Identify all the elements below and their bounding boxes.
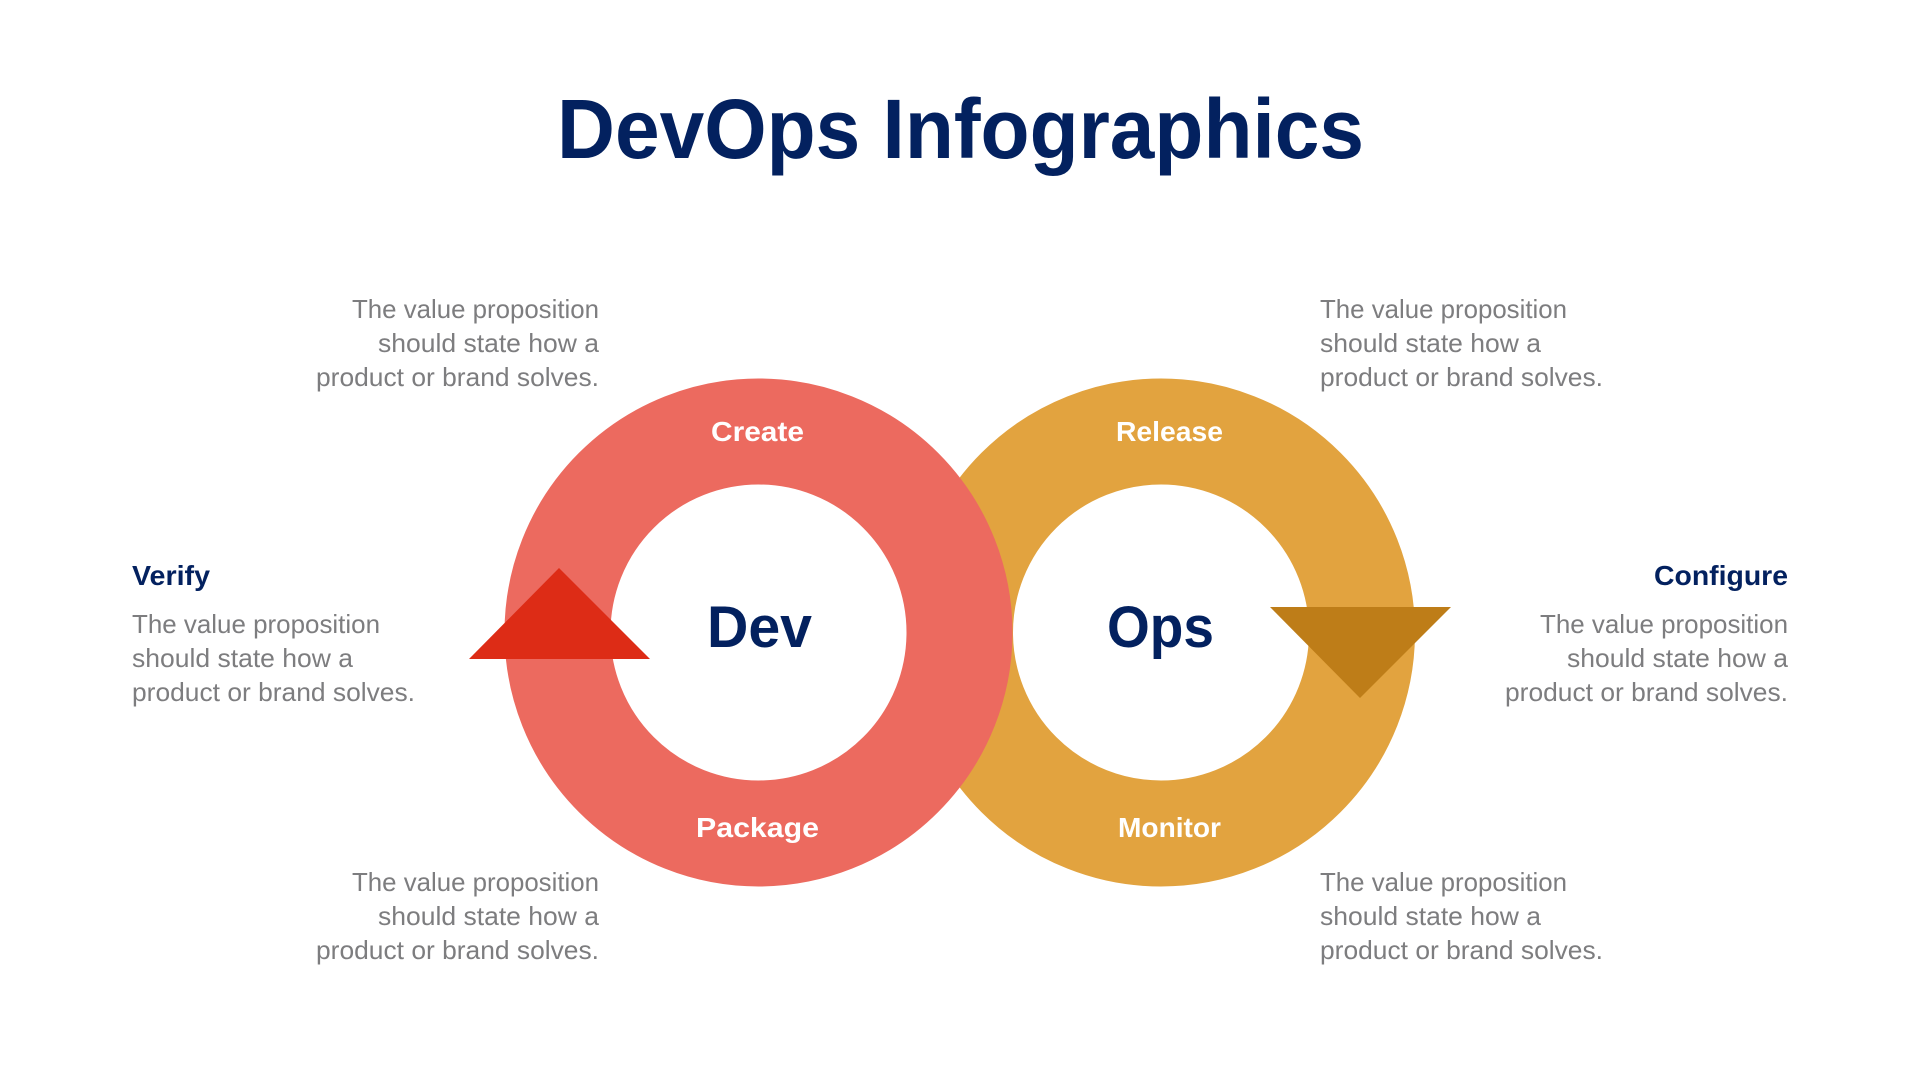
center label: Ops: Ops — [1107, 595, 1214, 660]
panel: Configure: Configure — [1654, 560, 1788, 591]
ring label: Create: Create — [711, 416, 804, 447]
text block: top right — [1320, 294, 1603, 392]
text block: top right: The value proposition — [1320, 294, 1567, 324]
text block: bottom left: should state how a — [378, 901, 600, 931]
text block: top left: The value proposition — [352, 294, 599, 324]
text block: bottom left: product or brand solves. — [316, 935, 599, 965]
text block: top left — [316, 294, 600, 392]
text block: bottom right: should state how a — [1320, 901, 1542, 931]
ring: Ops — [960, 432, 1362, 834]
center label: Dev: Dev — [707, 595, 812, 660]
text block: top left: should state how a — [378, 328, 600, 358]
ring label: Package: Package — [696, 812, 819, 843]
panel: Verify: Verify — [132, 560, 210, 591]
panel: Verify: should state how a — [132, 643, 354, 673]
panel: Verify — [132, 560, 415, 707]
text block: bottom left: The value proposition — [352, 867, 599, 897]
panel: Configure: should state how a — [1567, 643, 1789, 673]
ring: Dev — [558, 432, 960, 834]
text block: bottom right — [1320, 867, 1603, 965]
text block: top right: should state how a — [1320, 328, 1542, 358]
text block: top right: product or brand solves. — [1320, 362, 1603, 392]
ring label: Monitor: Monitor — [1118, 812, 1221, 843]
panel: Configure — [1505, 560, 1789, 707]
panel: Configure: product or brand solves. — [1505, 677, 1788, 707]
text block: bottom right: The value proposition — [1320, 867, 1567, 897]
text block: bottom right: product or brand solves. — [1320, 935, 1603, 965]
panel: Configure: The value proposition — [1540, 609, 1788, 639]
panel: Verify: The value proposition — [132, 609, 380, 639]
panel: Verify: product or brand solves. — [132, 677, 415, 707]
ring label: Release: Release — [1116, 416, 1223, 447]
arrow: Ops down triangle — [1270, 607, 1451, 698]
title: DevOps Infographics — [557, 82, 1364, 176]
text block: bottom left — [316, 867, 600, 965]
text block: top left: product or brand solves. — [316, 362, 599, 392]
arrow: Dev up triangle — [469, 568, 650, 659]
